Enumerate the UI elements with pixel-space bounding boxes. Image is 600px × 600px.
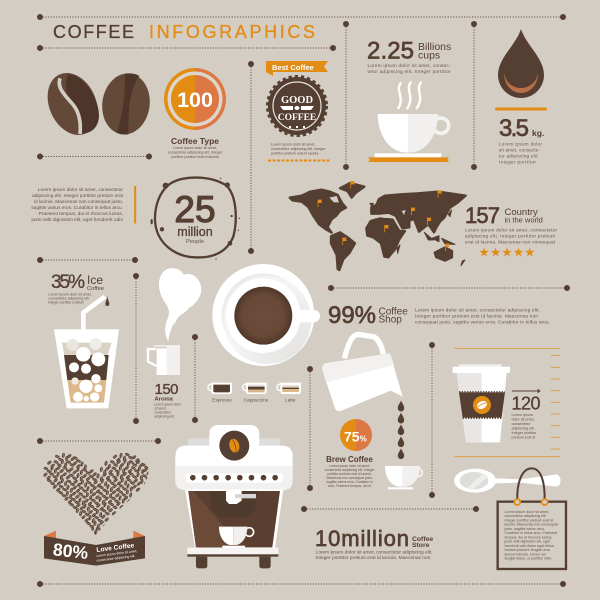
stat: 99% coffee shop: Lorem ipsum dolor sit amet, consectetur adipiscing elit. — [415, 308, 540, 312]
icon: coffee drop 3.5 kg: tur adipiscing elit. — [499, 154, 539, 158]
text block: left intro: sagittis varius eros. Curabitur in tellus arcu. — [31, 205, 123, 211]
stat: 99% coffee shop — [328, 302, 550, 329]
stat: 35% ice coffee — [48, 272, 104, 304]
badge: 100 coffee type: consectetur adipiscing elit. Integer — [168, 150, 223, 154]
stat: 35% ice coffee: 35% — [51, 272, 85, 293]
stat: 150 aroma — [154, 381, 182, 418]
stat: 10 million coffee store: Integer porttitor pretium erat id lacinia. Maecenas non — [316, 555, 431, 561]
text block: left intro: Lorem ipsum dolor sit amet, consectetur — [38, 187, 123, 193]
shopping bag with text: Lorem ipsum dolor sit amet, — [504, 510, 549, 514]
stat: 75% brew coffee: Brew Coffee — [326, 455, 373, 464]
stat: 35% ice coffee: Integer porttitor pretium — [48, 300, 84, 304]
icon: top view coffee cup — [212, 264, 320, 366]
greenland — [340, 183, 364, 198]
shopping bag with text: justo velit dignissim elit, eget — [504, 540, 550, 544]
stat: 75% brew coffee: Maecenas non consequat justo, — [326, 476, 373, 480]
stat: 157 country: Lorem ipsum dolor sit amet, consectetur — [465, 228, 557, 232]
stat: 2.25 billions cups: cups — [418, 50, 440, 62]
stat: 35% ice coffee: Coffee — [87, 286, 104, 292]
stat: 75% brew coffee — [325, 419, 375, 488]
stat: 99% coffee shop: 99% — [328, 302, 376, 329]
stat: 2.25 billions cups: 2.25 — [367, 38, 414, 64]
icon: small brew cup — [385, 466, 422, 489]
stat: 150 aroma: consectetur — [154, 410, 172, 414]
icon: coffee drop 3.5 kg — [495, 29, 547, 164]
banner: 80% love coffee: Lorem ipsum dolor sit amet, — [96, 549, 138, 558]
badge: 100 coffee type: 100 — [177, 88, 213, 112]
stat: 120: dolor sit amet, — [512, 418, 535, 422]
badge: best coffee: Lorem ipsum dolor sit amet, — [271, 142, 315, 146]
icon: iced coffee glass — [54, 295, 119, 408]
banner: 80% love coffee — [44, 531, 145, 566]
world map — [290, 181, 466, 270]
stat: 157 country: Country — [504, 207, 538, 218]
shopping bag with text — [498, 468, 566, 569]
shopping bag with text: laoreet lobortis. Donec vel — [504, 552, 546, 556]
badge: best coffee — [266, 61, 330, 160]
shopping bag with text: Integer porttitor pretium erat id — [504, 518, 553, 522]
badge: 100 coffee type: Coffee Type — [171, 136, 219, 146]
stat: 120: Lorem ipsum — [512, 413, 533, 417]
machine body — [185, 489, 283, 548]
stat: 10 million coffee store: Coffee — [412, 536, 433, 543]
machine top — [175, 425, 293, 490]
shopping bag with text: justo, sagittis varius arcu. — [504, 527, 545, 531]
latte: Latte — [285, 398, 296, 403]
stat: 99% coffee shop: consequat justo, sagittis varius eros. Curabitur in tellus arcu. — [415, 320, 550, 324]
icon: coffee drop 3.5 kg: Lorem ipsum dolor — [499, 142, 543, 146]
stat: 75% brew coffee: 75% — [344, 428, 367, 444]
stat: 75% brew coffee: Lorem ipsum dolor sit amet, — [329, 464, 370, 468]
icon: spoon — [454, 469, 561, 493]
stat: 25 million coffee stain: People — [186, 239, 204, 245]
shopping bag with text: lacinia. Maecenas non consequat — [504, 522, 558, 526]
text block: left intro: adipiscing elit. Integer porttitor pretium erat — [32, 193, 124, 199]
stat: 157 country — [465, 203, 557, 260]
stat: 120 — [512, 394, 540, 440]
shopping bag with text: Curabitur in tellus arcu. Praesent — [504, 531, 557, 535]
seal — [268, 77, 326, 135]
banner: 80% love coffee: consectetur adipiscing elit. — [96, 554, 136, 563]
text block: left intro — [31, 186, 136, 224]
left bean — [38, 65, 107, 143]
title: INFOGRAPHICS — [149, 22, 315, 42]
stat: 35% ice coffee: Ice — [87, 273, 103, 287]
stat: 10 million coffee store: Store — [412, 542, 430, 549]
right bean — [98, 70, 154, 138]
stat: 120: pretium erat id — [512, 436, 535, 440]
stat: 99% coffee shop: Shop — [378, 314, 402, 326]
stat: 157 country: 157 — [465, 203, 500, 228]
icon: coffee drop 3.5 kg: Integer porttitor — [499, 160, 537, 164]
stat: 10 million coffee store: 10million — [315, 526, 409, 551]
badge: 100 coffee type: porttitor pretium erat id lacinia — [171, 155, 219, 159]
shopping bag with text: feugiat libero, ut porttitor nibh. — [504, 556, 552, 560]
shopping bag with text: consectetur adipiscing elit. — [504, 514, 547, 518]
badge: best coffee: consectetur adipiscing elit. Integer — [271, 147, 326, 151]
badge: best coffee: porttitor pretium erat id lacinia — [271, 152, 318, 156]
banner: 80% love coffee: 80% — [52, 539, 89, 563]
stat: 120: consectetur — [512, 422, 531, 426]
banner: 80% love coffee: Love Coffee — [96, 542, 135, 554]
south america — [331, 232, 355, 270]
stat: 75% brew coffee: arcu. Praesent tempus, dui et — [328, 484, 371, 488]
stat: 99% coffee shop: Coffee — [378, 306, 408, 318]
icon: coffee drop 3.5 kg: kg. — [532, 128, 544, 138]
stat: 150 aroma: Aroma — [154, 396, 174, 402]
seal: COFFEE — [278, 113, 316, 123]
badge: 100 coffee type — [164, 68, 226, 159]
coffee types: espresso cappuccino latte — [208, 383, 301, 403]
stat: 2.25 billions cups: Billions — [418, 41, 451, 53]
stat: 120: 120 — [512, 394, 540, 414]
icon: takeaway cup and scale — [453, 348, 560, 457]
text block: left intro: Praesent tempus, dui et rhoncus luctus, — [39, 211, 123, 217]
stat: 157 country: erat id lacinia. Maecenas non consequat — [465, 240, 556, 244]
espresso: Espresso — [212, 398, 232, 403]
ribbon: Best Coffee — [272, 63, 314, 72]
australia and islands — [370, 203, 465, 266]
stat: 99% coffee shop: Integer porttitor pretium erat id lacinia. Maecenas non — [415, 314, 538, 318]
text block: left intro: id lacinia. Maecenas non consequat justo, — [34, 199, 123, 205]
badge: 100 coffee type: Lorem ipsum dolor sit amet, — [173, 146, 217, 150]
stat: 120: Integer porttitor — [512, 431, 537, 435]
north america — [290, 190, 346, 233]
icon: white coffee cup with steam — [368, 82, 449, 162]
stat: 150 aroma: Lorem ipsum dolor — [154, 402, 182, 406]
stat: 10 million coffee store — [315, 526, 433, 561]
icon: milk pitcher and drops — [322, 334, 404, 459]
stat: 75% brew coffee: sagittis varius eros. Curabitur in — [326, 480, 373, 484]
icon: coffee drop 3.5 kg: 3.5 — [499, 115, 529, 142]
cappuccino: Cappuccino — [244, 398, 269, 403]
shopping bag with text: tempus, dui et rhoncus luctus, — [504, 536, 552, 540]
stat: 2.25 billions cups: Lorem ipsum dolor sit amet, consec- — [368, 63, 451, 68]
icon: coffee beans — [38, 65, 154, 143]
icon: espresso machine — [175, 425, 293, 568]
stat: 157 country: adipiscing elit. Integer porttitor pretium — [465, 234, 555, 238]
stat: 75% brew coffee: porttitor pretium erat id lacinia. — [327, 472, 372, 476]
stat: 150 aroma: sit amet, — [154, 406, 167, 410]
icon: coffee drop 3.5 kg: sit amet, consecte- — [499, 148, 541, 152]
shopping bag with text: hendrerit odio libero eget tellus. — [504, 544, 555, 548]
stat: 2.25 billions cups: tetur adipiscing elit. Integer porttitor — [368, 69, 451, 74]
machine cup — [219, 527, 254, 548]
stat: 25 million coffee stain: 25 — [174, 189, 216, 230]
shopping bag with text: Nullam posuere feugiat urna — [504, 548, 550, 552]
bays and seas — [329, 196, 406, 218]
stat: 35% ice coffee: consectetur adipiscing elit. — [48, 296, 90, 300]
africa — [366, 218, 405, 257]
title: COFFEE — [53, 22, 134, 42]
title — [53, 22, 315, 42]
flags — [318, 181, 449, 251]
text block: left intro: justo velit dignissim elit, eget hendrerit odio — [31, 217, 123, 223]
seal: GOOD — [281, 95, 313, 106]
machine base — [187, 548, 278, 568]
stat: 25 million coffee stain: million — [177, 225, 213, 239]
icon: steam and aroma mug — [148, 268, 201, 375]
stars: ★★★★★ — [478, 244, 536, 260]
stat: 35% ice coffee: Lorem ipsum dolor sit amet, — [48, 292, 92, 296]
stat: 10 million coffee store: Lorem ipsum dolor sit amet, consectetur adipiscing elit. — [316, 550, 432, 556]
stat: 120: adipiscing elit. — [512, 426, 535, 430]
stat: 150 aroma: 150 — [154, 381, 178, 398]
heart made of coffee beans — [43, 452, 151, 538]
stat: 2.25 billions cups — [367, 38, 451, 74]
stat: 75% brew coffee: consectetur adipiscing elit. Integer — [325, 468, 375, 472]
stat: 150 aroma: adipiscing elit. — [154, 414, 175, 418]
stat: 25 million coffee stain — [150, 178, 240, 260]
eurasia — [371, 192, 466, 232]
stat: 157 country: in the world — [504, 216, 543, 224]
